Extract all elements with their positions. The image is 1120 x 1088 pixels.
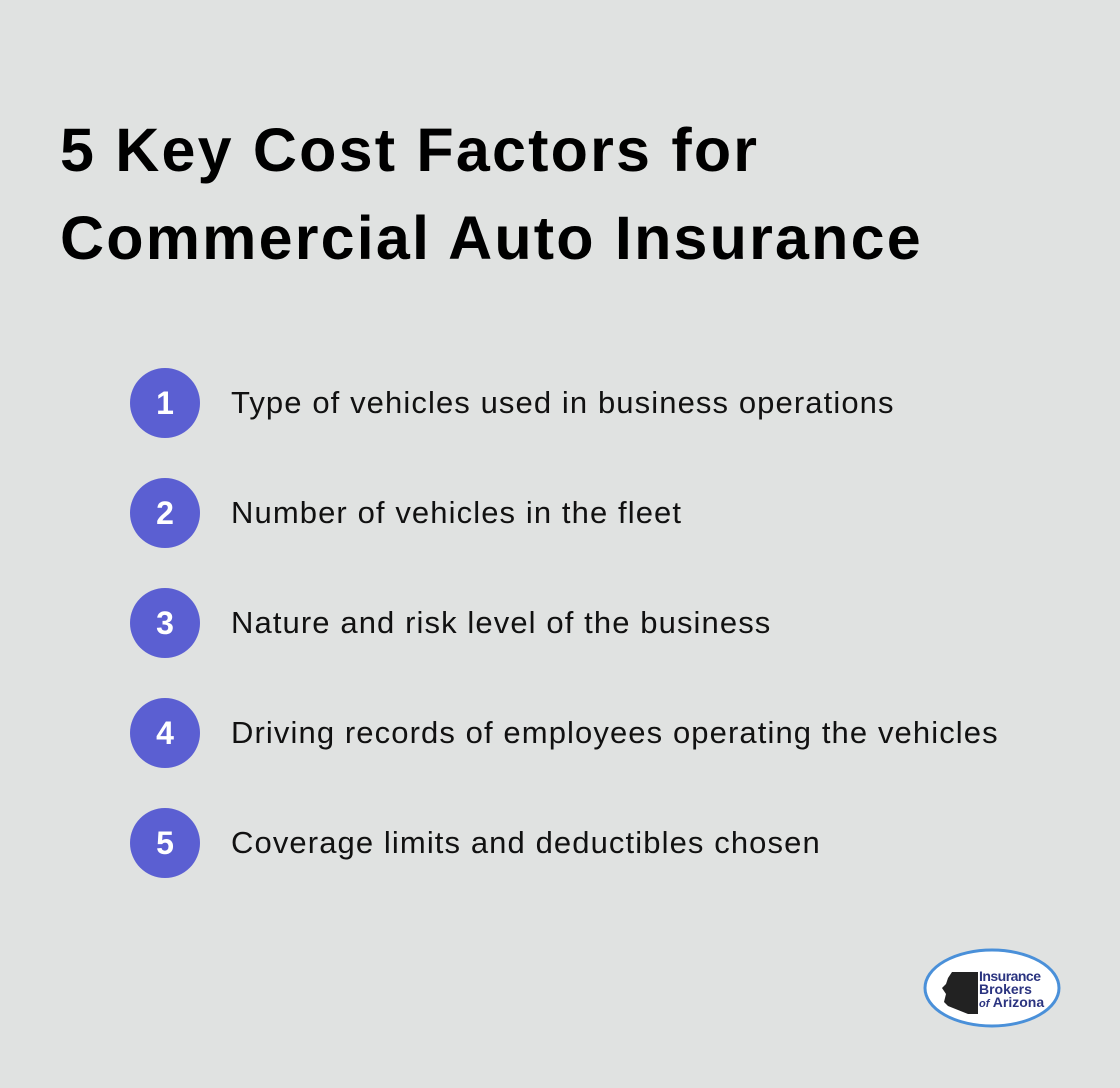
item 1: 1 bbox=[156, 385, 174, 421]
item 3: Nature and risk level of the business bbox=[231, 605, 771, 640]
item 1 bbox=[130, 368, 895, 438]
item 1: Type of vehicles used in business operations bbox=[231, 385, 895, 420]
logo: Insurance bbox=[979, 968, 1041, 984]
item 5 bbox=[130, 808, 821, 878]
item 2: Number of vehicles in the fleet bbox=[231, 495, 682, 530]
title: 5 Key Cost Factors for bbox=[60, 116, 759, 184]
title bbox=[60, 116, 923, 272]
item 3 bbox=[130, 588, 771, 658]
logo bbox=[924, 948, 1060, 1028]
item 4 bbox=[130, 698, 999, 768]
item 3: 3 bbox=[156, 605, 174, 641]
item 5: 5 bbox=[156, 825, 174, 861]
item 2 bbox=[130, 478, 682, 548]
item 2: 2 bbox=[156, 495, 174, 531]
item 4: Driving records of employees operating the vehicles bbox=[231, 715, 999, 750]
logo: of Arizona bbox=[979, 994, 1044, 1010]
title: Commercial Auto Insurance bbox=[60, 204, 923, 272]
logo: Brokers bbox=[979, 981, 1032, 997]
item 4: 4 bbox=[156, 715, 174, 751]
item 5: Coverage limits and deductibles chosen bbox=[231, 825, 821, 860]
